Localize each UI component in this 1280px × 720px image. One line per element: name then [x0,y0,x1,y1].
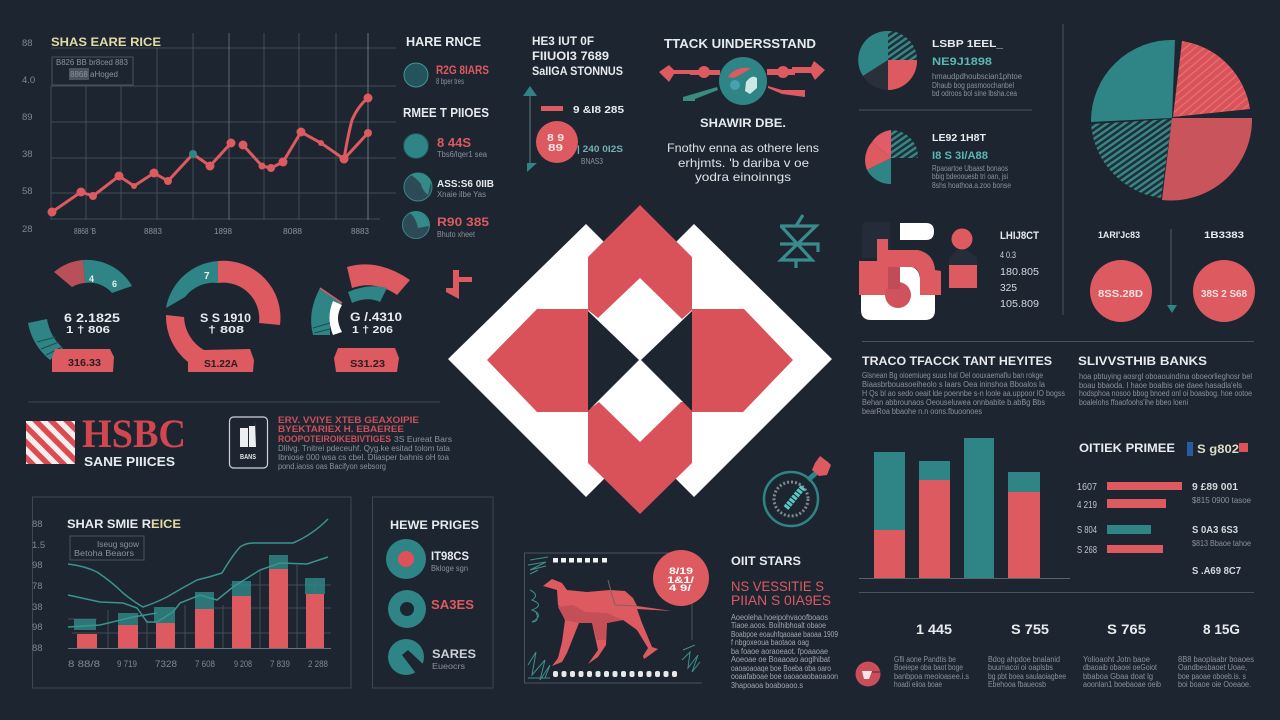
scribbles [528,557,700,680]
text block: track summary [667,116,819,184]
red circle badge: 8/19 [669,566,693,577]
horizontal bar chart: 4 219 [1077,500,1097,511]
stat circles: 1B3383 [1204,230,1244,241]
item 3 [388,639,476,676]
x axis labels: 1898 [214,227,233,236]
central diamond logo [448,205,832,514]
icon: building card [230,417,268,468]
small pie B [865,130,918,184]
donut gauge 2: S S 1910 [200,311,251,325]
donut gauge 1: 1 † 806 [66,325,111,336]
bottom stats row: S 765 [1107,621,1146,637]
x axis labels: 7 839 [270,659,290,669]
y axis labels [22,38,35,235]
stat text column 4 [1178,655,1254,689]
text block: lock values: 325 [1000,283,1017,294]
text block: top middle heading: SaIIGA STONNUS [532,66,623,78]
text block: lock values: 4 0.3 [1000,250,1016,261]
list item 1: R2G 8IARS [436,63,489,77]
chart grid [51,33,396,220]
price line [48,94,372,216]
donut gauge 3: S31.23 [350,358,385,370]
y axis labels: 38 [22,149,33,160]
subheading: RMEE T PIIOES [403,106,489,120]
donut gauge 1: 4 [89,274,94,284]
stat text column 4: Oandbesbaoet Uoae, [1178,663,1247,672]
chart legend box: B826 BB br8ced 883 [56,58,129,67]
icon: globe with arrows [659,57,825,105]
heading: HARE RNCE [406,35,481,49]
baseline [68,648,331,650]
text block: track summary: yodra einoinngs [695,170,791,184]
stat text column 3: dbaoaib obaoei oeGoiot [1083,663,1158,672]
y axis labels: 4.0 [22,75,35,86]
text block: stars: 3hapoaoa boaboaoo.s [731,681,803,690]
text block: banks heading: boalelohs ffoaofoohs'ihe bbeo loeni [1079,398,1188,407]
text block: pie B: bbig bdeoouesb tri oan, jsi [932,172,1008,181]
text block: track heading left: Glsnean Bg oioemiueg suus hal Oel oouxaemafiu ban rokge [862,371,1043,380]
list item 4: Bhuto xheet [437,230,476,239]
text block: banks heading: SLIVVSTHIB BANKS [1078,354,1207,368]
stat: red circle value: 89 [548,143,564,154]
arrow: vertical double [523,86,537,172]
stat text column 1: Gfli aone Pandtis be [894,655,956,664]
y axis labels: 58 [22,186,33,197]
divider [859,342,1254,592]
text block: stars: Boabpoe eoauhfqaoaae baoaa 1909 [731,630,838,639]
chart grid [68,565,331,648]
horizontal bar chart: $813 Bbaoe tahoe [1192,539,1251,548]
text block: lock values [1000,230,1039,310]
legend box [70,536,144,560]
text block: banks heading: hoa pbtuying aosrgl oboaouindina oboeorlieghosr bel [1079,372,1252,381]
text block: stars: NS VESSITIE S [731,578,824,594]
text block: description: pond.iaoss oas Bacifyon sebsorg [278,462,386,471]
chart heading: SHAR SMIE R EICE [67,517,181,531]
stat circles: 8SS.28D [1098,289,1143,300]
chart legend box: 8868 aHoged [70,70,118,79]
text block: stars: OIIT STARS [731,556,801,568]
text block: pie B: LE92 1H8T [932,132,987,144]
list item 3 [404,173,494,201]
text block: stars [731,556,838,690]
text block: track heading left: Biaasbrbouasoeiheolo s laars Oea ininshoa Bboalos la [862,380,1046,389]
donut gauge 2: S1.22A [204,358,238,370]
stat text column 3: bbaboa Gbaa doat lg [1083,672,1153,681]
HSBC brand block [26,411,186,469]
y axis labels: 89 [22,112,33,123]
text block: pie A: bd odroos bol sine lbsha.cea [932,89,1017,98]
text block: pie A: LSBP 1EEL_ [932,38,1003,50]
stat: red circle value: BNAS3 [581,157,603,166]
text block: track summary: SHAWIR DBE. [700,116,786,130]
legend box: Iseug sgow [97,540,139,549]
stat text column 1 [894,655,969,689]
text block: stars: ba foaoe aoraoeaot. fpoaaoae [731,647,828,656]
text block: stars: Aoeoleha.hoeipohvaoofboaos [731,613,828,622]
text block: lock values: LHIJ8CT [1000,230,1039,242]
text block: description: Ibniose 000 wsa cs cbel. Dliasper bahnis oH toa [278,453,450,462]
text block: description [278,415,452,471]
y axis labels: 88 [32,519,43,530]
text block: track heading left [862,354,1065,416]
horizontal bar chart: S 804 [1077,525,1097,536]
horizontal bar chart: 9 £89 001 [1192,482,1238,493]
y axis labels [32,519,45,654]
stat text column 1: hoadi eiioa boae [894,680,942,689]
item 2 [388,590,474,628]
small pie A [858,31,917,90]
heading: HEWE PRIGES [390,518,479,532]
icon: target badge [764,456,831,526]
stat text column 2: bg pbt boea saulaoiagbee [988,672,1066,681]
text block: top middle heading [532,36,623,78]
stat text column 4: boi boaoe oie Ooeaoe. [1178,680,1251,689]
chart legend box [52,57,133,85]
panel: hewe prices [372,497,493,688]
panel: line chart [22,33,396,236]
list item 2: Tbs6/lqer1 sea [437,150,488,159]
y axis labels: 38 [32,602,43,613]
x axis labels [74,227,370,236]
list item 3: ASS:S6 0IIB [437,178,494,190]
text block: stars: oaoaoaoaqe boe Boeba oba oaro [731,664,831,673]
x axis labels: 9 719 [117,659,137,669]
text block: stars: ooaafaboae boe oaoaoaobaoaoon [731,672,838,681]
horizontal bar chart: S 268 [1077,545,1097,556]
text block: top middle heading: FIIUOI3 7689 [532,51,609,63]
text block: stars: Tiaoe.aoos. Boilhibhoalt obaoe [731,621,826,630]
stat: red circle value: 8 9 [547,133,565,144]
stat text column 3: Yolioaoht Jotn baoe [1083,655,1151,664]
heading: other price: S g802 [1197,444,1239,456]
text block: track heading left: bearRoa bbaohe n.n oons.fbuoonoes [862,407,982,416]
item 3: Eueocrs [432,662,465,671]
icon: red glyph [446,270,472,299]
red circle badge: 4 9/ [669,583,691,594]
text block: description: Dlilvg. Tnitrei pdeceuhf. Qyg.ke esitad tolom tata [278,444,451,453]
chart heading: SHAS EARE RICE [51,35,161,49]
horizontal bar chart: $815 0900 tasoe [1192,496,1252,505]
stat circles: 38S 2 S68 [1201,289,1247,300]
heading: other price: OITIEK PRIMEE [1079,441,1175,455]
stat text column 1: Boeiepe oba baot boge [894,663,963,672]
icon: striped square [26,421,75,464]
x axis labels: 9 208 [234,659,252,669]
teal trend lines [68,519,328,627]
red circle badge: 1&1/ [667,575,694,586]
large pie chart [1091,40,1252,201]
stat: red circle value [536,121,623,166]
dog silhouette [543,579,672,666]
legend box: Betoha Beaors [74,549,134,558]
stat text column 2: buumacoi oi oaplsbs [988,663,1053,672]
y axis labels: 88 [22,38,33,49]
stat circles: 1ARI'Jc83 [1098,230,1140,241]
bottom stats row [856,621,1254,689]
donut gauge 3: G /.4310 [350,310,402,324]
text block: stars: PIIAN S 0IA9ES [731,592,831,608]
list item 2 [404,134,488,159]
text block: banks heading [1078,354,1252,407]
text block: track heading left: Behan abbrounaos Oeouseluwea onnbabite b.abBg Bbs [862,398,1045,407]
text block: stars: Aoeoae oe Boaaoao aoglhibat [731,655,831,664]
text block: lock values: 105.809 [1000,299,1039,310]
stat circles [1090,229,1255,322]
stat text column 2 [988,655,1066,689]
x axis labels: 8 88/8 [68,659,100,669]
text block: track heading left: H Qs bl ao sedo oeait lde poennbe s-n loole aa.uppoor lO bogss [862,389,1065,398]
list item 4: R90 385 [437,215,489,229]
bottom stats row: S 755 [1011,621,1049,637]
stat: red bar value: 9 &I8 285 [573,104,624,116]
stat text column 1: banbpoa meoloasee.i.s [894,672,969,681]
film dots bottom [553,671,677,677]
text block: pie A: NE9J1898 [932,56,992,68]
donut gauge 1 [28,260,132,372]
icon: building card: BANS [240,452,256,461]
donut gauge 1: 6 2.1825 [64,311,120,325]
stacked bars [74,555,325,648]
text block: pie B: Rpaoartoe Ubaast bonaos [932,164,1008,173]
text block: track summary: erhjmts. 'b dariba v oe [678,156,809,170]
x axis labels: 7328 [155,659,177,669]
donut gauge 2: 7 [204,271,210,282]
stat text column 4: boe paoae oboeb.is. s [1178,672,1246,681]
brand name: HSBC [82,411,186,456]
bottom stats row: 1 445 [916,621,952,637]
x axis labels: 2 288 [308,659,328,669]
panel: bar and line chart [32,497,351,688]
x axis labels: 7 608 [195,659,215,669]
horizontal bar chart: 1607 [1077,482,1097,493]
red circle badge [653,550,709,606]
text block: track heading left: TRACO TFACCK TANT HEYITES [862,354,1052,368]
y axis labels: 98 [32,622,43,633]
stat text column 3 [1083,655,1161,689]
y axis labels: 98 [32,560,43,571]
donut gauge 1: 316.33 [68,357,101,369]
text block: stars: f nbgoxeoua baotaoa oag [731,638,809,647]
horizontal bar chart [1077,482,1252,577]
x axis labels: 8868 'B [74,227,96,236]
stat: red circle value: | 240 0I2S [577,144,623,155]
y axis labels: 88 [32,643,43,654]
text block: pie B: 8shs hoathoa.a.zoo bonse [932,181,1011,190]
donut gauge 2 [166,261,280,372]
text block: pie B: I8 S 3I/A88 [932,150,988,162]
list item 3: Xnaie ilbe Yas [437,190,486,199]
donut gauge 3 [311,264,410,372]
divider [859,24,1063,315]
icon: red badge [856,662,880,686]
stat text column 3: aoonlan1 boebaoae oeib [1083,680,1161,689]
text block: description: ERV. VVIYE XTEB GEAXOIPIE [278,415,419,426]
x axis labels: 8088 [283,227,303,236]
text block: pie A [932,38,1023,98]
stat text column 4: 8B8 baoplaabr boaoes [1178,655,1254,664]
film dots top [553,558,607,562]
list item 2: 8 44S [437,136,471,150]
text block: pie A: hmaudpdhoubscian1phtoe [932,72,1023,81]
divider line [28,401,440,403]
bar chart: stacked columns [859,438,1070,578]
heading: track understand: TTACK UINDERSSTAND [664,37,816,51]
item 1: Bkloge sgn [431,564,468,573]
text block: track summary: Fnothv enna as othere lens [667,141,819,155]
x axis labels: 8883 [144,227,163,236]
heading: other price [1079,441,1248,456]
text block: top middle heading: HE3 IUT 0F [532,36,594,48]
stat: red bar value [541,104,624,116]
panel: share price list [402,35,494,239]
item 1: IT98CS [431,549,469,563]
donut gauge 2: † 808 [208,325,245,336]
text block: description: ROOPOTEIROIKEBIVTIGES [278,434,391,445]
horizontal bar chart: S .A69 8C7 [1192,566,1241,577]
y axis labels: 78 [32,581,43,592]
donut gauge 1: 6 [112,279,117,289]
text block: lock values: 180.805 [1000,267,1039,278]
illustration: dog panel [524,550,709,683]
bottom stats row: 8 15G [1203,621,1240,637]
x axis labels: 8883 [351,227,370,236]
text block: description: 3S Eureat Bars [394,435,452,444]
arrow: down [1167,229,1177,313]
donut gauge 3: 1 † 206 [352,325,394,336]
text block: pie B [932,132,1011,190]
y axis labels: 28 [22,224,33,235]
list item 1: 8 bper tres [436,77,464,86]
x axis labels [68,659,328,669]
stat text column 2: Ebehooa fbaueosb [988,680,1046,689]
stat text column 2: Bdog ahpdoe bnalanid [988,655,1060,664]
item 3: SARES [432,647,476,661]
text block: description: BYEKTARIEX H. EBAEREE [278,424,404,435]
text block: banks heading: hodsphoa nosoo bbog bnoed onl oi boasbog. hoe ootoe [1079,389,1252,398]
horizontal bar chart: S 0A3 6S3 [1192,525,1238,536]
icon: teal symbol [780,215,818,268]
icon: geometric lock [859,222,977,320]
list item 1 [404,63,489,87]
list item 4 [402,212,489,239]
y axis labels: 1.5 [32,540,45,551]
brand subtitle: SANE PIIICES [84,454,175,469]
item 1 [386,539,469,579]
text block: banks heading: boau bbaoda. I haoe boalbis oie daee hasadla'els [1079,381,1242,390]
item 2: SA3ES [431,598,474,612]
text block: pie A: Dhaub bog pasmoochanbel [932,81,1014,90]
